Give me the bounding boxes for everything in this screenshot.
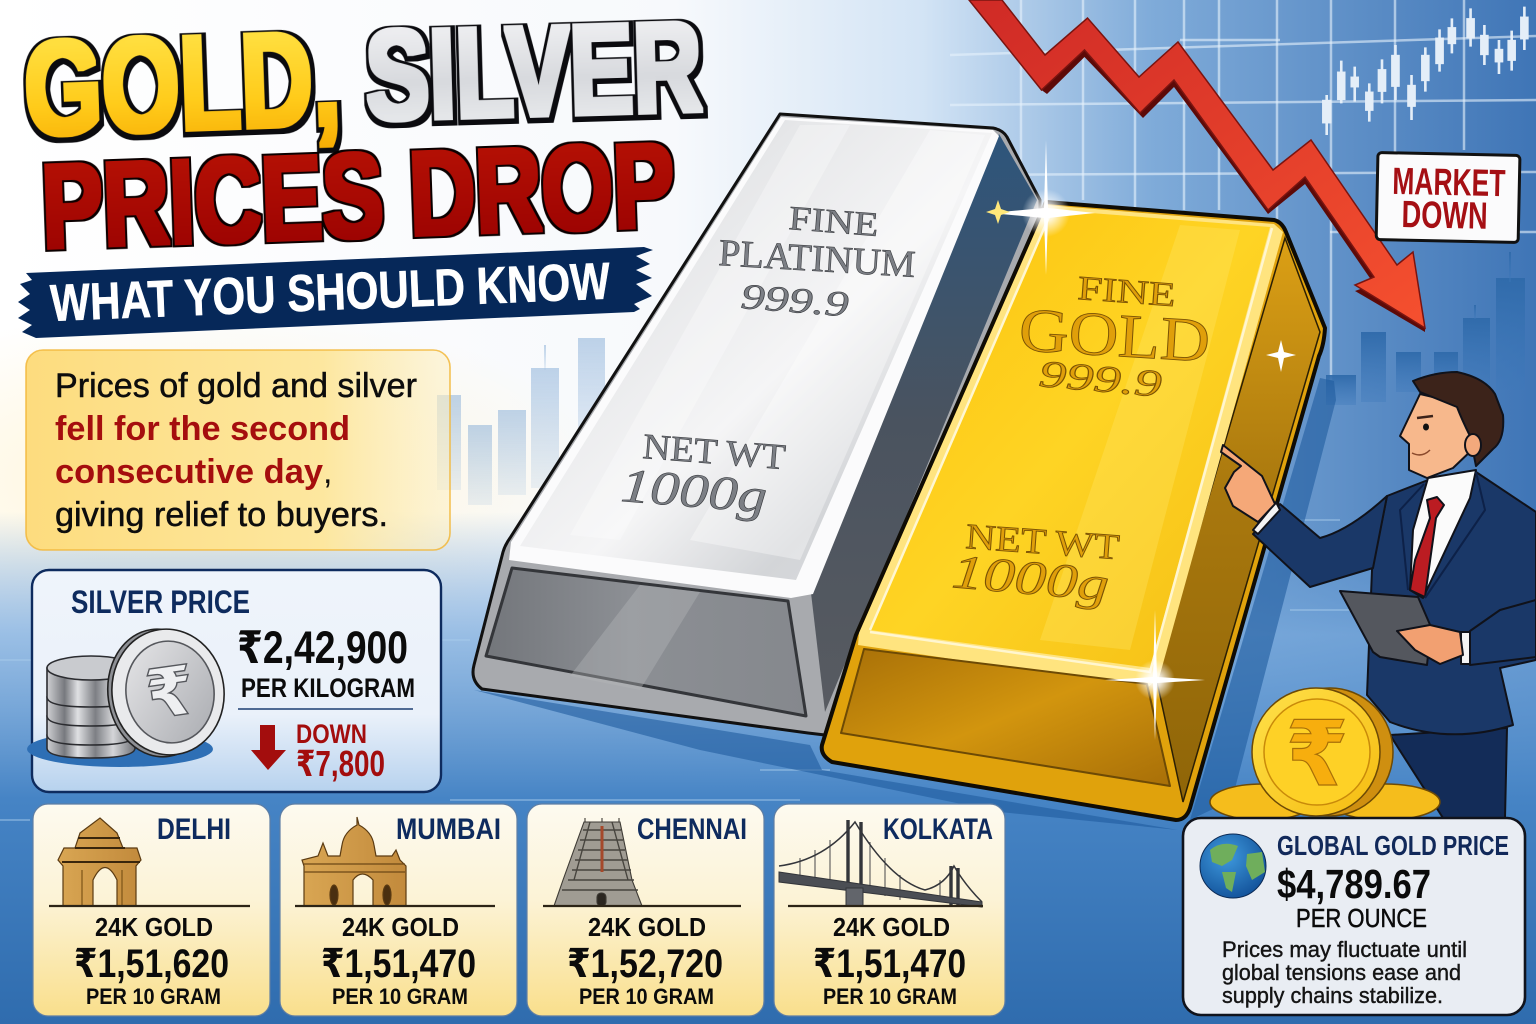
gold label: 24K GOLD (95, 912, 213, 942)
icon: silver coins (27, 622, 232, 767)
unit: PER 10 GRAM (579, 984, 714, 1009)
gold bar engraving: 1000g (950, 545, 1111, 612)
shirt (1410, 470, 1476, 598)
skyline left (437, 338, 605, 505)
price: ₹1,51,620 (74, 942, 229, 986)
city name: MUMBAI (396, 813, 501, 846)
unit: PER 10 GRAM (332, 984, 468, 1009)
gold bar engraving: 999.9 (1037, 353, 1163, 406)
icon: silver coins: ₹ (141, 652, 199, 734)
pointing hand (1221, 445, 1275, 522)
rupee symbol: ₹ (1286, 705, 1348, 805)
candlestick chart (1322, 7, 1528, 135)
tablet (1340, 591, 1431, 665)
intro text: Prices of gold and silver (55, 367, 417, 405)
global note: global tensions ease and (1222, 960, 1461, 985)
gold label: 24K GOLD (342, 912, 459, 942)
title (22, 0, 704, 274)
gold bar engraving: NET WT (964, 516, 1121, 567)
subtitle text: WHAT YOU SHOULD KNOW (49, 253, 612, 333)
sparkles (986, 140, 1296, 740)
title: PRICES DROP (39, 118, 677, 274)
head (1400, 372, 1503, 478)
title: GOLD, (22, 4, 343, 164)
card: Chennai (527, 804, 764, 1016)
skyline right (1326, 252, 1525, 405)
silver bar side face (811, 134, 1037, 712)
silver bar engraving: 1000g (619, 459, 769, 523)
global unit: PER OUNCE (1296, 903, 1427, 933)
card: Delhi (33, 804, 270, 1016)
silver bar engraving: NET WT (641, 426, 787, 477)
silver unit: PER KILOGRAM (241, 673, 415, 703)
jacket (1367, 472, 1536, 734)
gold label: 24K GOLD (588, 912, 706, 942)
gold bar side face (1156, 238, 1320, 802)
sleeve (1470, 600, 1536, 665)
silver change: DOWN (296, 719, 367, 749)
silver bar front face (486, 568, 806, 716)
market down text: DOWN (1401, 194, 1488, 238)
price: ₹1,52,720 (567, 942, 723, 986)
bar shadow on floor (474, 378, 1336, 830)
global price: $4,789.67 (1277, 861, 1431, 907)
landmark: India Gate (58, 818, 141, 906)
panel: global gold price (1183, 818, 1525, 1015)
silver bar engraving: 999.9 (739, 276, 850, 324)
landmark: Gateway of India (302, 817, 406, 906)
chart grid backdrop (950, 0, 1536, 380)
landmark: temple gopuram (554, 818, 642, 906)
intro text: consecutive day (55, 453, 323, 491)
subtitle banner (18, 247, 653, 338)
silver change: ₹7,800 (296, 743, 385, 784)
city name: KOLKATA (883, 813, 993, 846)
unit: PER 10 GRAM (86, 984, 221, 1009)
holding hand (1397, 625, 1463, 664)
gold bar (822, 202, 1325, 820)
silver bar engraving: FINE (787, 200, 880, 244)
global note: Prices may fluctuate until (1222, 937, 1467, 962)
gold bar top face (870, 210, 1270, 668)
global note: supply chains stabilize. (1222, 983, 1443, 1008)
card: Kolkata (774, 804, 1005, 1016)
intro text: , (323, 453, 332, 491)
icon: globe (1200, 834, 1266, 898)
silver bar (473, 114, 1040, 735)
silver price value: ₹2,42,900 (237, 622, 408, 673)
price: ₹1,51,470 (813, 942, 966, 986)
cuff (1253, 502, 1280, 534)
unit: PER 10 GRAM (823, 984, 957, 1009)
intro callout (26, 350, 450, 550)
man in suit (1221, 372, 1536, 818)
city name: DELHI (157, 813, 231, 846)
silver bar engraving (619, 200, 917, 523)
tie (1410, 497, 1444, 597)
market down label (1376, 153, 1520, 242)
red falling arrow (969, 0, 1425, 332)
panel: silver price (27, 570, 441, 792)
price: ₹1,51,470 (321, 942, 476, 986)
gold label: 24K GOLD (833, 912, 950, 942)
silver bar engraving: PLATINUM (717, 232, 917, 286)
floor water reflections (0, 520, 1370, 820)
landmark: Howrah bridge (779, 820, 982, 907)
intro text: giving relief to buyers. (55, 496, 388, 534)
card: Mumbai (280, 804, 517, 1016)
silver bar rim (509, 117, 999, 598)
trousers (1390, 728, 1507, 818)
silver bar top face (520, 120, 992, 580)
gold coins (1210, 688, 1440, 820)
icon: down arrow (251, 725, 286, 770)
silver price heading: SILVER PRICE (71, 584, 250, 620)
gold bar front face (841, 649, 1170, 786)
gold bar engraving: GOLD (1017, 296, 1212, 376)
intro text: fell for the second (55, 410, 350, 448)
city name: CHENNAI (637, 813, 747, 846)
gold bar rim (858, 205, 1283, 688)
gold bar engraving (950, 270, 1212, 612)
gold bar engraving: FINE (1076, 270, 1177, 314)
arm (1253, 496, 1387, 587)
